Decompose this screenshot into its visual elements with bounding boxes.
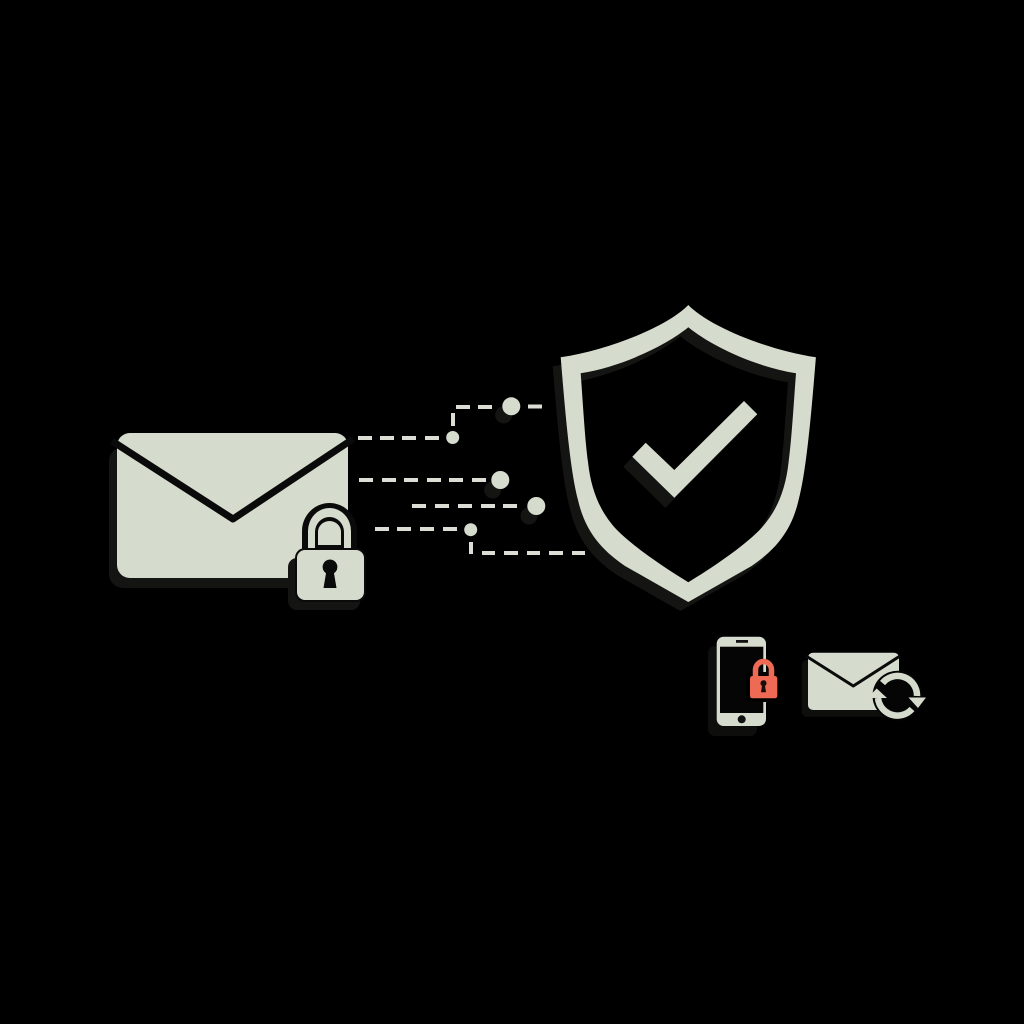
red padlock xyxy=(746,662,781,702)
icon: shield with check mark xyxy=(553,305,816,611)
icon: smartphone with red padlock xyxy=(708,637,781,736)
check mark shadow xyxy=(623,411,748,508)
small envelope body xyxy=(808,653,899,710)
sync icon backdrop xyxy=(872,671,922,721)
padlock xyxy=(295,503,366,602)
padlock shadow xyxy=(288,558,360,610)
phone home button xyxy=(738,715,746,723)
envelope flap line xyxy=(112,439,353,519)
node shadows xyxy=(484,406,538,524)
envelope body xyxy=(117,433,348,578)
icon: envelope with sync arrows xyxy=(802,653,926,721)
small envelope shadow xyxy=(802,660,893,717)
phone speaker xyxy=(736,640,748,643)
nodes xyxy=(446,397,545,536)
shield outline xyxy=(561,305,816,602)
connector: dashed data paths xyxy=(358,397,585,555)
dashes xyxy=(358,404,585,555)
icon: envelope with padlock xyxy=(109,433,366,610)
keyhole xyxy=(323,560,337,588)
phone body xyxy=(717,637,766,726)
envelope shadow xyxy=(109,447,340,588)
check mark xyxy=(632,401,757,498)
shield shadow xyxy=(553,314,808,611)
phone screen xyxy=(720,647,763,713)
phone shadow xyxy=(708,646,757,736)
small envelope flap line xyxy=(806,656,900,686)
sync arrows xyxy=(868,676,926,716)
